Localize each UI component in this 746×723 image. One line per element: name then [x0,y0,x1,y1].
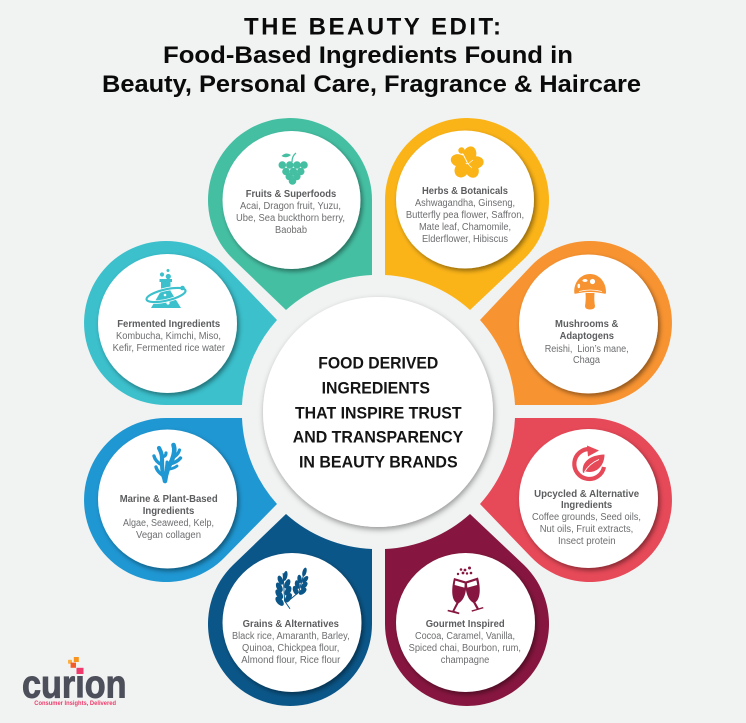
text block: mushrooms list: Reishi, Lion’s mane, [545,344,629,355]
heading: fruits and superfoods: Fruits & Superfoods [246,189,337,200]
panel: mushrooms and adaptogens [480,241,672,405]
heading: grains and alternatives: Grains & Alternatives [243,619,339,630]
heading: marine and plant-based [120,494,218,517]
title: Beauty, Personal Care, Fragrance & Haircare [102,71,641,98]
text block: gourmet list: Spiced chai, Bourbon, rum, [409,643,521,654]
logo: curion: curion [22,663,126,706]
icon: mushroom [574,274,606,310]
text block: fermented list [113,331,226,354]
text block: fruits list [236,201,345,236]
heading: mushrooms and adaptogens: Mushrooms & [555,319,618,330]
text block: central message: AND TRANSPARENCY [293,429,463,447]
text block: herbs list: Mate leaf, Chamomile, [419,222,511,233]
panel: upcycled and alternative [480,418,672,582]
text block: gourmet list: Cocoa, Caramel, Vanilla, [415,631,515,642]
heading: marine and plant-based: Marine & Plant-Based [120,494,218,505]
heading: fermented ingredients: Fermented Ingredients [117,319,221,330]
text block: grains list [232,631,350,666]
title: Food-Based Ingredients Found in [163,42,573,69]
title: THE BEAUTY EDIT: [244,14,501,40]
panel: fruits and superfoods [208,118,372,310]
text block: gourmet list [409,631,521,666]
icon: grapes [278,153,308,185]
text block: marine list: Algae, Seaweed, Kelp, [123,518,214,529]
heading: mushrooms and adaptogens [555,319,618,342]
panel: marine and plant-based [84,418,277,582]
logo: curion: Consumer Insights, Delivered [34,700,116,707]
panel: fermented ingredients [84,241,277,405]
text block: central message: INGREDIENTS [322,379,430,397]
title [102,14,641,98]
panel: herbs and botanicals [385,118,549,310]
text block: herbs list [406,198,524,245]
heading: mushrooms and adaptogens: Adaptogens [560,331,614,342]
text block: fruits list: Baobab [275,225,307,236]
text block: herbs list: Elderflower, Hibiscus [422,234,508,245]
text block: fruits list: Acai, Dragon fruit, Yuzu, [240,201,341,212]
text block: marine list [123,518,214,541]
text block: upcycled list: Nut oils, Fruit extracts, [540,524,633,535]
text block: grains list: Quinoa, Chickpea flour, [242,643,339,654]
text block: gourmet list: champagne [441,655,490,666]
text block: mushrooms list [545,344,629,366]
text block: grains list: Black rice, Amaranth, Barley, [232,631,350,642]
icon: hibiscus flower [449,145,484,180]
text block: herbs list: Butterfly pea flower, Saffron, [406,210,524,221]
text block: fermented list: Kombucha, Kimchi, Miso, [116,331,221,342]
text block: upcycled list: Coffee grounds, Seed oils, [532,512,641,523]
icon: flask with orbit [145,269,187,308]
heading: gourmet inspired: Gourmet Inspired [426,619,505,630]
heading: upcycled and alternative [534,489,640,511]
text block: central message: THAT INSPIRE TRUST [295,404,462,422]
heading: upcycled and alternative: Ingredients [561,500,613,511]
text block: marine list: Vegan collagen [136,530,201,541]
text block: grains list: Almond flour, Rice flour [241,655,341,666]
text block: fruits list: Ube, Sea buckthorn berry, [236,213,345,224]
text block: central message [293,354,463,471]
text block: upcycled list [532,512,641,547]
icon: champagne glasses [448,566,484,614]
icon: wheat stalks [272,565,314,610]
text block: central message: IN BEAUTY BRANDS [299,453,458,471]
heading: marine and plant-based: Ingredients [143,506,195,517]
panel: gourmet inspired [385,514,549,706]
text block: herbs list: Ashwagandha, Ginseng, [415,198,515,209]
text block: mushrooms list: Chaga [573,355,600,366]
panel: central circle [263,297,493,527]
text block: upcycled list: Insect protein [558,536,616,547]
heading: herbs and botanicals: Herbs & Botanicals [422,186,508,197]
panel: grains and alternatives [208,514,372,706]
text block: fermented list: Kefir, Fermented rice water [113,343,226,354]
icon: seaweed coral [154,445,180,481]
text block: central message: FOOD DERIVED [318,354,438,372]
heading: upcycled and alternative: Upcycled & Alternative [534,489,640,500]
icon: recycle arrow with leaf [574,446,604,479]
